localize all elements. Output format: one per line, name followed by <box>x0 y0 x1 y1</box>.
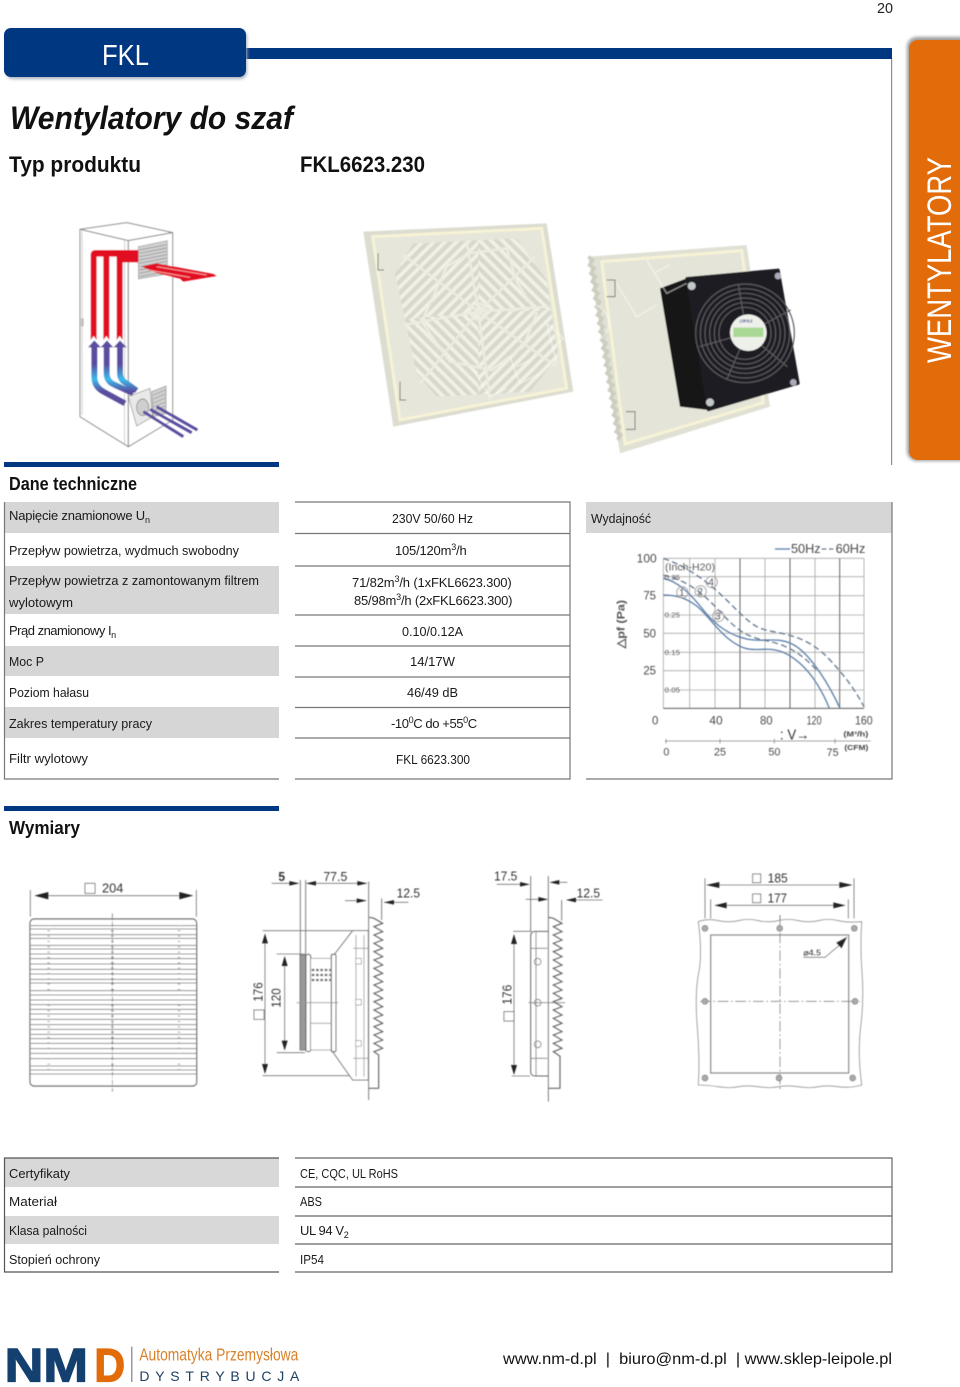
technical data table: values: -10 <box>391 716 409 731</box>
cool air arrows <box>88 340 137 403</box>
header bar: FKL <box>102 40 149 72</box>
page number: 20 <box>877 0 893 17</box>
technical data table: labels: wylotowym <box>8 595 73 610</box>
technical data table: values: 71/82m <box>352 575 394 590</box>
technical data table: labels: Filtr wylotowy <box>9 751 88 766</box>
logo: Automatyka Przemysłowa <box>139 1345 298 1365</box>
dashed curves <box>663 558 864 707</box>
chart axis labels: 25 <box>643 664 656 678</box>
properties table: values <box>295 1158 892 1272</box>
lower fan unit <box>128 386 166 426</box>
logo <box>5 1340 300 1387</box>
properties table: values: IP54 <box>300 1252 324 1267</box>
technical data table: labels: Poziom hałasu <box>9 685 89 700</box>
technical data table: values: 3 <box>451 542 456 552</box>
performance chart: 3 <box>715 612 721 623</box>
technical data table: labels: Przepływ powietrza, wydmuch swobodny <box>9 543 239 558</box>
chart axis labels: : V→ <box>780 727 809 743</box>
drawing: side view of filter <box>494 870 603 1102</box>
drawing: side view with fan: 5 <box>278 870 285 884</box>
fan unit: LEIPOLE <box>739 319 753 324</box>
technical data table: values: 105/120m <box>395 543 451 558</box>
technical data table: values: 3 <box>396 592 401 602</box>
drawing: side view with fan: 77.5 <box>323 870 347 884</box>
chart axis labels: 40 <box>709 713 723 727</box>
performance chart: 1 <box>679 588 685 599</box>
drawing: side view with fan <box>251 870 420 1100</box>
section bar: dimensions <box>4 806 279 811</box>
technical data table: values: 14/17W <box>410 654 456 669</box>
technical data table: labels: Napięcie znamionowe U <box>9 508 145 523</box>
performance chart: 0.35 <box>665 573 680 582</box>
photo: filter and fan unit <box>363 223 798 453</box>
properties table: labels <box>4 1158 279 1272</box>
performance panel: Wydajność <box>591 511 651 526</box>
chart axis labels: 160 <box>855 713 873 727</box>
technical data table: values: 0 <box>409 715 414 725</box>
hot air arrows <box>91 250 217 340</box>
properties table: labels: Klasa palności <box>9 1223 87 1238</box>
heading: Wymiary: Wymiary <box>9 818 80 838</box>
chart axis labels: 50 <box>643 626 656 640</box>
chart axis labels: 0 <box>663 746 669 758</box>
technical data table: values: /h (1xFKL6623.300) <box>399 575 512 590</box>
side tab: WENTYLATORY <box>907 37 960 461</box>
performance chart: 0.05 <box>665 686 680 695</box>
drawing: mounting cut-out: 177 <box>768 891 787 905</box>
chart axis labels: 50 <box>768 746 780 758</box>
chart axis labels: 120 <box>807 713 822 727</box>
technical data table: values: /h <box>456 543 466 558</box>
technical data table: values: 0.10/0.12A <box>402 624 463 639</box>
chart legend: 50Hz <box>791 542 821 556</box>
dimension drawings: side B and mounting <box>494 870 863 1102</box>
product type <box>9 152 425 177</box>
performance chart: (Inch-H20) <box>665 563 715 574</box>
chart axis labels: △pf (Pa) <box>616 600 628 649</box>
drawing: side view with fan: 176 <box>251 982 265 1002</box>
properties table: labels: Stopień ochrony <box>9 1252 100 1267</box>
chart axis labels <box>616 552 873 759</box>
technical data table: labels: Moc P <box>9 654 44 669</box>
chart axis labels: (CFM) <box>844 743 869 752</box>
technical data table: values: 230V 50/60 Hz <box>392 511 473 526</box>
performance chart: 0.25 <box>665 611 680 620</box>
solid curves <box>663 578 840 708</box>
chart axis labels: (M³/h) <box>843 730 869 739</box>
fan unit <box>588 245 798 453</box>
drawing: side view with fan: 120 <box>270 988 284 1008</box>
technical data table: values: FKL 6623.300 <box>396 752 470 767</box>
technical data table: labels: n <box>145 515 150 525</box>
chart axis labels: 0 <box>652 713 659 727</box>
chart legend <box>775 542 865 556</box>
performance chart: 2 <box>697 587 703 598</box>
technical data table: values: 0 <box>463 715 468 725</box>
technical data table: values: 3 <box>394 574 399 584</box>
technical data table: values: C do +55 <box>413 716 463 731</box>
properties table: values: CE, CQC, UL RoHS <box>300 1166 398 1181</box>
drawing: mounting cut-out <box>696 872 863 1092</box>
dimension drawings: front and side A <box>30 870 420 1100</box>
technical data table: values: 85/98m <box>354 593 396 608</box>
performance chart: 4 <box>708 578 714 589</box>
header bar <box>4 28 892 465</box>
chart legend: 60Hz <box>836 542 865 556</box>
chart axis labels: 75 <box>643 589 656 603</box>
side tab: WENTYLATORY: WENTYLATORY <box>921 157 959 363</box>
logo: DYSTRYBUCJA <box>139 1368 300 1384</box>
drawing: front louvre view: 204 <box>102 881 124 896</box>
drawing: mounting cut-out: ⌀4.5 <box>803 947 821 957</box>
technical data table: labels: n <box>111 630 116 640</box>
chart axis labels: 75 <box>827 747 839 759</box>
cabinet airflow diagram <box>80 223 217 447</box>
properties table: values: 2 <box>344 1230 349 1240</box>
technical data table: values: C <box>468 716 477 731</box>
performance panel <box>586 502 892 779</box>
section bar: technical data <box>4 462 279 467</box>
heading: Dane techniczne: Dane techniczne <box>9 474 137 494</box>
properties table: labels: Certyfikaty <box>9 1166 70 1181</box>
filter grille <box>363 223 573 427</box>
chart axis labels: 25 <box>714 746 726 758</box>
chart axis labels: 100 <box>637 552 657 566</box>
technical data table: values: 46/49 dB <box>407 685 458 700</box>
performance chart: 0.15 <box>665 648 680 657</box>
technical data table: labels: Przepływ powietrza z zamontowanym filtrem <box>9 573 259 588</box>
product type: FKL6623.230 <box>300 152 425 177</box>
drawing: side view of filter: 12.5 <box>577 886 600 900</box>
properties table: values: UL 94 V <box>300 1223 344 1238</box>
technical data table: values: /h (2xFKL6623.300) <box>401 593 512 608</box>
properties table: values: ABS <box>300 1194 322 1209</box>
performance chart <box>616 542 873 759</box>
watermark <box>473 260 687 397</box>
drawing: side view of filter: 176 <box>500 985 514 1005</box>
drawing: side view of filter: 17.5 <box>494 870 517 884</box>
chart axis labels: 80 <box>760 713 773 727</box>
technical data table: labels <box>4 502 279 779</box>
upper vent <box>138 241 167 279</box>
drawing: side view with fan: 12.5 <box>397 886 420 900</box>
footer contacts: www.nm-d.pl | biuro@nm-d.pl | www.sklep-leipole.pl <box>502 1351 892 1368</box>
properties table: labels: Materiał <box>9 1194 57 1209</box>
drawing: mounting cut-out: 185 <box>768 872 788 886</box>
technical data table: values <box>295 502 570 779</box>
drawing: front louvre view <box>30 881 197 1092</box>
technical data table: labels: Zakres temperatury pracy <box>9 716 152 731</box>
technical data table: labels: Prąd znamionowy I <box>9 623 111 638</box>
product type: Typ produktu <box>9 152 141 177</box>
title: Wentylatory do szaf <box>10 100 296 136</box>
